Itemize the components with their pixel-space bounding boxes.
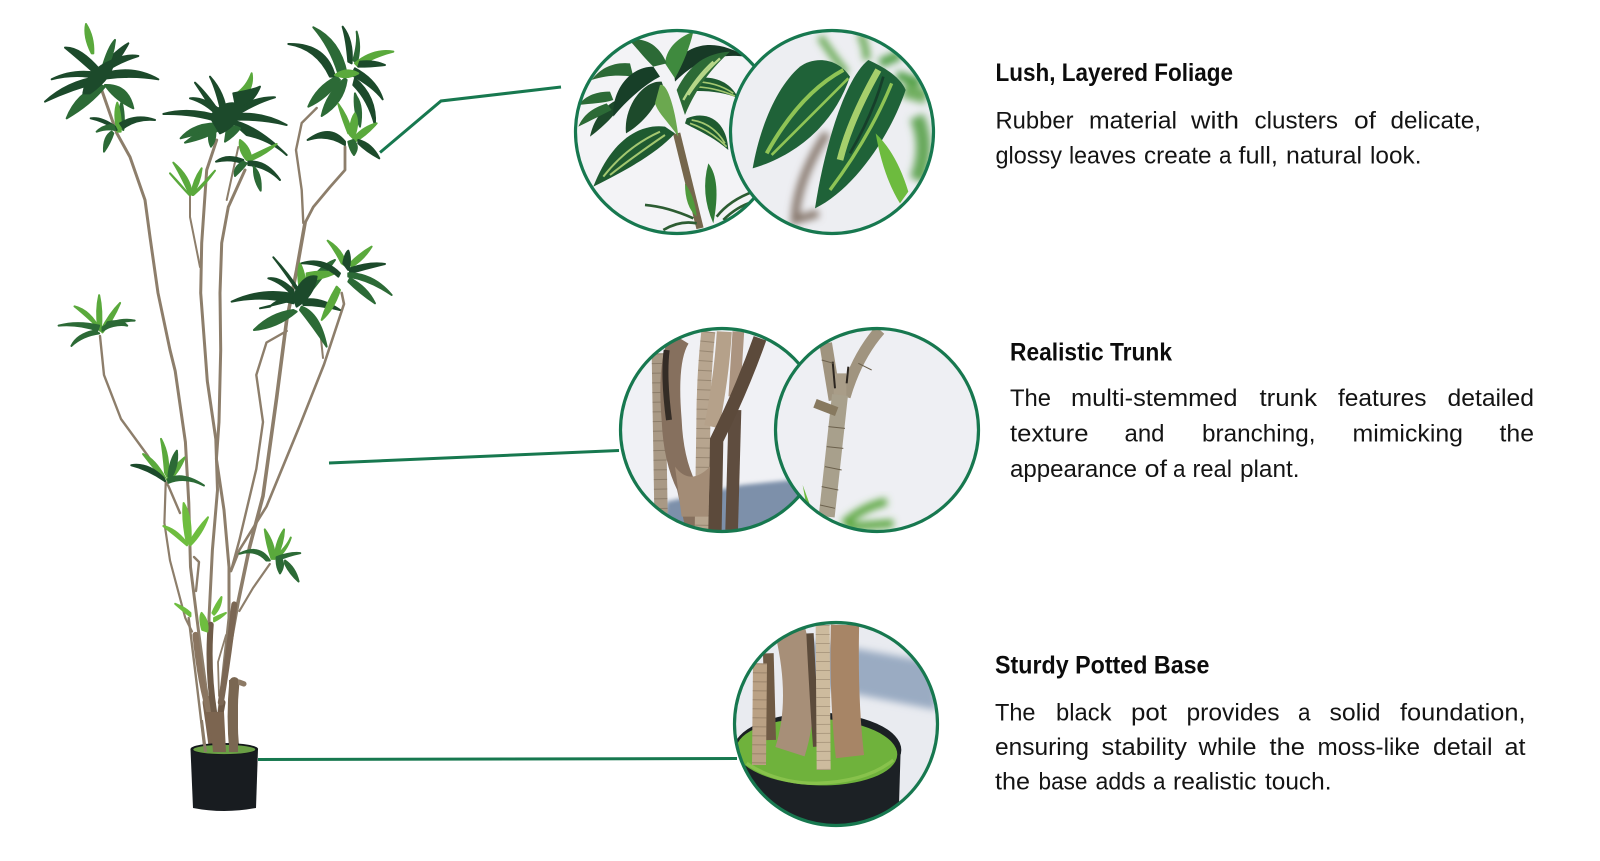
description: trunk: detailed bbox=[1448, 385, 1534, 412]
description: base: detail bbox=[1433, 734, 1492, 761]
description: trunk: The bbox=[1010, 385, 1051, 412]
heading: trunk: Realistic Trunk bbox=[1010, 338, 1172, 366]
description: trunk: trunk bbox=[1260, 385, 1318, 412]
description: trunk: and bbox=[1124, 420, 1164, 448]
crown: lower left sprigs bbox=[59, 295, 300, 632]
description: foliage: look. bbox=[1370, 142, 1422, 170]
description: trunk: features bbox=[1338, 385, 1426, 412]
crown: top centre bbox=[163, 73, 287, 191]
description: base: pot bbox=[1131, 700, 1167, 726]
description: trunk: plant. bbox=[1240, 456, 1300, 483]
description: trunk: of bbox=[1144, 456, 1167, 483]
crown: small light sprig bbox=[170, 163, 215, 195]
plant illustration bbox=[45, 24, 393, 811]
description: base: a bbox=[1298, 700, 1311, 726]
crown: middle right bbox=[232, 241, 392, 347]
pot bbox=[190, 680, 258, 811]
heading: foliage: Lush, Layered Foliage bbox=[996, 59, 1233, 87]
text block: base bbox=[995, 652, 1526, 796]
description: base: moss-like bbox=[1318, 734, 1420, 761]
description: base: at bbox=[1504, 734, 1526, 761]
detail circle: potted base close-up bbox=[730, 618, 945, 833]
leader line: base bbox=[258, 758, 737, 760]
description: base: foundation, bbox=[1400, 700, 1526, 726]
crown: top right bbox=[288, 27, 393, 158]
description: base: a bbox=[1153, 768, 1166, 796]
description: foliage: clusters bbox=[1254, 108, 1338, 134]
plant stems bbox=[100, 90, 345, 752]
description: base: black bbox=[1056, 700, 1112, 726]
text block: trunk bbox=[1010, 338, 1534, 483]
description: trunk: mimicking bbox=[1352, 420, 1463, 448]
leaf crowns bbox=[45, 24, 393, 632]
description: foliage: Rubber bbox=[996, 108, 1074, 134]
heading: base: Sturdy Potted Base bbox=[995, 652, 1210, 680]
description: base: solid bbox=[1330, 700, 1380, 726]
description: base: adds bbox=[1096, 768, 1146, 796]
description: foliage: natural bbox=[1286, 142, 1362, 170]
leader line: trunk bbox=[329, 450, 619, 463]
description: trunk: a bbox=[1173, 456, 1186, 483]
description: base bbox=[995, 700, 1526, 796]
description: foliage: leaves bbox=[1069, 142, 1136, 170]
text block: foliage bbox=[996, 59, 1481, 170]
description: base: stability bbox=[1102, 734, 1188, 761]
description: trunk: real bbox=[1192, 456, 1232, 483]
description: base: touch. bbox=[1265, 768, 1332, 796]
description: foliage: glossy bbox=[996, 142, 1063, 170]
detail circle: trunk close-up right bbox=[770, 325, 985, 540]
description: foliage: create bbox=[1144, 142, 1212, 170]
detail circle: foliage close-up right bbox=[725, 25, 940, 240]
description: trunk: branching, bbox=[1202, 420, 1316, 448]
description: trunk: the bbox=[1500, 420, 1534, 448]
description: foliage: with bbox=[1190, 108, 1239, 134]
description: base: The bbox=[995, 700, 1036, 726]
detail circle: trunk close-up left bbox=[618, 326, 800, 534]
description: trunk: multi-stemmed bbox=[1071, 385, 1238, 412]
crown: top left bbox=[45, 24, 158, 152]
leader line: foliage bbox=[380, 87, 561, 152]
description: foliage: of bbox=[1354, 108, 1376, 134]
description: base: ensuring bbox=[995, 734, 1089, 761]
description: trunk bbox=[1010, 385, 1534, 483]
description: foliage: delicate, bbox=[1390, 108, 1481, 134]
detail circle: foliage close-up left bbox=[574, 28, 754, 236]
description: base: base bbox=[1038, 768, 1088, 796]
description: foliage: a bbox=[1219, 142, 1232, 170]
description: trunk: texture bbox=[1010, 420, 1088, 448]
description: foliage bbox=[996, 108, 1481, 170]
description: base: while bbox=[1197, 734, 1256, 761]
description: base: the bbox=[1270, 734, 1305, 761]
description: foliage: material bbox=[1089, 108, 1177, 134]
description: trunk: appearance bbox=[1010, 456, 1137, 483]
description: base: realistic bbox=[1173, 768, 1256, 796]
description: foliage: full, bbox=[1238, 142, 1278, 170]
description: base: provides bbox=[1186, 700, 1280, 726]
description: base: the bbox=[995, 768, 1030, 796]
